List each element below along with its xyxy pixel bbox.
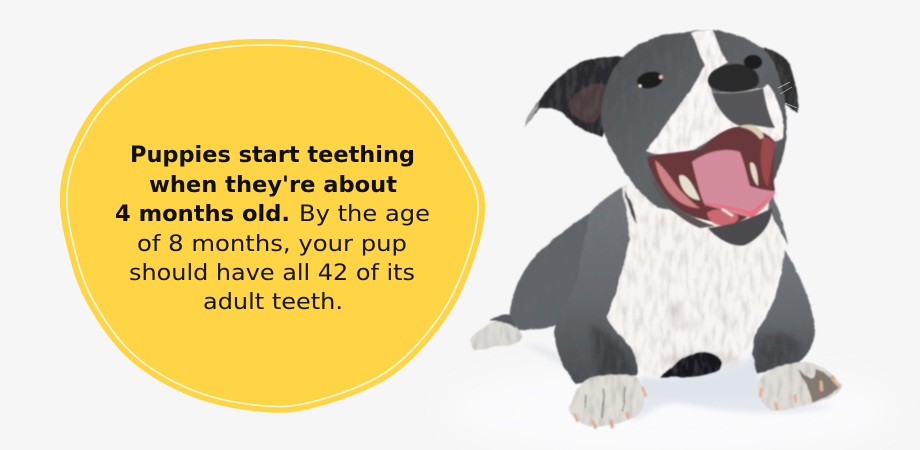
text block: teething callout: By the age (299, 201, 430, 227)
white blaze and muzzle (646, 30, 784, 154)
text block: teething callout: Puppies start teething (130, 142, 415, 168)
canine tooth (750, 163, 758, 186)
panel: yellow blob callout (60, 39, 485, 413)
lower teeth (679, 175, 700, 200)
front leg left (554, 187, 638, 384)
hind leg (510, 213, 598, 330)
white inner outline (67, 45, 478, 407)
eye left (636, 69, 664, 91)
eye right (744, 55, 762, 69)
right ear (763, 48, 799, 113)
floor shadow (522, 344, 835, 420)
belly dark patch (660, 352, 722, 377)
upper teeth (740, 125, 764, 139)
white chest (607, 185, 785, 376)
panel: floor glow (440, 365, 900, 450)
text block: teething callout (115, 142, 430, 315)
lower lip (650, 172, 715, 228)
text block: teething callout: of 8 months, your pup (137, 231, 407, 257)
mouth (647, 125, 776, 228)
neck (622, 170, 777, 240)
head (601, 30, 787, 222)
whiskers (778, 82, 797, 108)
text block: teething callout: adult teeth. (203, 289, 343, 315)
nose (708, 64, 759, 92)
front paw left (569, 374, 645, 427)
right gum (761, 137, 775, 187)
tongue (692, 150, 776, 218)
muzzle gray patch (712, 88, 775, 128)
lower gum front (707, 210, 738, 226)
left gum (655, 160, 700, 208)
puppy face details (636, 55, 776, 246)
illustration: puppy body and head (470, 30, 842, 427)
text block: teething callout: when they're about (149, 172, 397, 198)
text block: teething callout: should have all 42 of its (129, 260, 415, 286)
left ear (525, 57, 623, 137)
text block: teething callout: 4 months old. (115, 201, 290, 227)
hind paw (470, 320, 522, 350)
front leg right (753, 250, 815, 374)
chin (708, 208, 772, 246)
front paw right (757, 362, 842, 411)
